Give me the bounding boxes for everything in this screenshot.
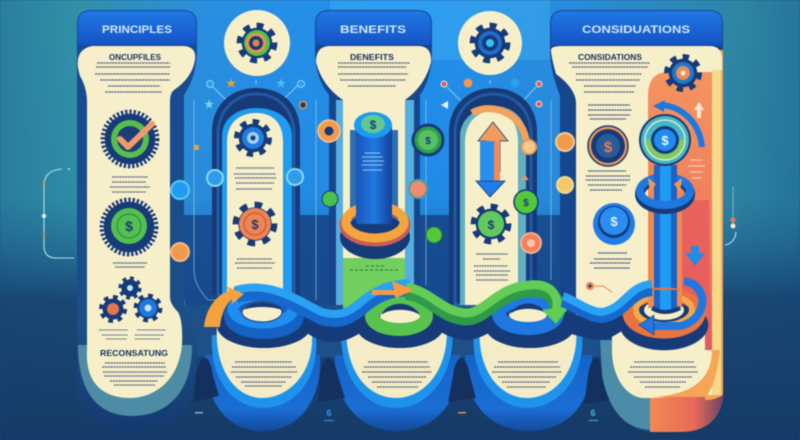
text block [95, 63, 170, 92]
ring three [485, 300, 575, 348]
pillar [350, 112, 398, 230]
icon: three small gears [101, 278, 160, 321]
cream body [551, 46, 722, 398]
header bar [316, 11, 431, 45]
ribbon: base shadow [240, 300, 650, 332]
side strips [336, 100, 414, 305]
text block [586, 171, 630, 190]
text block [235, 259, 275, 268]
panel: principles [77, 10, 197, 432]
pillar: $ [370, 118, 377, 132]
ribbon: blue segment two [563, 289, 652, 316]
arch body [212, 88, 300, 295]
red strip [682, 200, 709, 305]
icon: orange gear [667, 57, 699, 89]
panel shell [77, 10, 197, 432]
lobe 4 [465, 355, 592, 431]
icon: dollar gear: $ [125, 218, 133, 234]
lobe three cream [346, 318, 447, 398]
blue ring on pillar [640, 168, 690, 209]
text block [628, 362, 698, 387]
lobe two cream [217, 325, 312, 398]
top connectors: ★ [226, 78, 236, 90]
panel: arch one [194, 10, 306, 295]
page number six [589, 408, 598, 421]
ribbon: green segment [406, 290, 557, 318]
subheading: DENEFITS [350, 53, 395, 62]
icon: blue gear [237, 122, 269, 154]
panel: arch two [441, 11, 542, 305]
icon: dollar medallion: $ [604, 139, 613, 156]
panel shell [315, 10, 432, 305]
arrow: orange left [204, 286, 244, 327]
text block [234, 168, 276, 189]
subheading: ONCUPFILES [109, 53, 162, 62]
icon: dollar medallion [588, 126, 628, 166]
small round icons: $ [523, 198, 529, 209]
text block [588, 105, 632, 119]
orange marker [194, 145, 199, 150]
icon: dollar gear [103, 201, 155, 253]
icon: blue coin: $ [610, 214, 618, 229]
text block [338, 63, 410, 86]
orange arc [472, 109, 526, 140]
text block [99, 330, 166, 339]
lobe 3 [335, 355, 460, 431]
dash markers [195, 412, 466, 414]
top connectors [204, 78, 306, 111]
icon: green gear: $ [488, 218, 495, 232]
text block [110, 177, 150, 192]
heading: BENEFITS [340, 24, 406, 36]
lower left teal band [600, 340, 650, 430]
green base [343, 258, 405, 308]
top connectors [441, 78, 542, 109]
panel: considerations [550, 10, 723, 432]
icon: orange gear [236, 205, 274, 243]
ring two [356, 303, 444, 348]
lobe rims [212, 320, 582, 408]
lobe four cream [480, 325, 576, 398]
lobe text blocks [231, 362, 698, 387]
cream body [78, 46, 195, 398]
small round icons [171, 120, 574, 261]
lower right orange band [650, 395, 723, 432]
bottom lobes [194, 318, 610, 431]
ring four [620, 281, 708, 350]
orange tall strip [648, 72, 712, 350]
icon: blue coin [593, 203, 635, 245]
text block [569, 63, 650, 92]
subheading: RECONSATUNG [100, 348, 168, 358]
orange marker [586, 282, 612, 292]
ribbon with rings [204, 281, 708, 350]
gaps between lobes [194, 358, 219, 402]
heading: PRINCIPLES [102, 24, 172, 36]
lower cream fill [612, 320, 705, 398]
medallion: gear [224, 10, 290, 76]
icon: up and down arrows [476, 122, 508, 197]
medallion: gear [458, 11, 522, 75]
small round icons: $ [425, 136, 431, 147]
subheading: CONSIDATIONS [578, 53, 643, 62]
page number six: 6 [326, 408, 332, 418]
icon: green gear [474, 207, 508, 241]
icon: check gear [104, 113, 156, 165]
right side connector decoration [725, 186, 737, 245]
icon: dollar medallion large [639, 114, 691, 166]
text block [474, 254, 510, 280]
page number six [324, 408, 334, 421]
top connectors: ★ [204, 99, 214, 111]
heading: CONSIDUATIONS [582, 24, 690, 36]
text block [492, 362, 562, 387]
cream interior [227, 113, 283, 295]
text block [113, 263, 147, 267]
top connectors: ★ [276, 78, 286, 90]
header bar [78, 11, 196, 45]
panel shell [550, 10, 723, 432]
text block [362, 362, 432, 387]
icon: dollar medallion large: $ [661, 133, 669, 148]
panel: benefits [315, 10, 432, 308]
ribbon: blue segment one [236, 288, 410, 319]
arch body [449, 88, 537, 305]
arrow: orange right [372, 281, 414, 298]
text block [102, 363, 167, 385]
text block [231, 362, 297, 386]
pillar [648, 165, 682, 315]
dark column stripes between panels [182, 100, 612, 357]
orange ring [340, 200, 410, 259]
page number six: 6 [590, 408, 596, 418]
text block [590, 253, 632, 268]
lobe 2 [205, 355, 320, 431]
right strip text and arrow [685, 102, 705, 266]
cream interior [465, 111, 518, 305]
blue curved arrow [653, 100, 702, 147]
ring one [217, 295, 311, 348]
left side connector decoration [42, 168, 74, 258]
lower rim band [78, 345, 192, 416]
cream body [316, 46, 431, 262]
text block [350, 266, 400, 270]
icon: orange gear: $ [251, 217, 259, 232]
header bar [551, 11, 722, 45]
